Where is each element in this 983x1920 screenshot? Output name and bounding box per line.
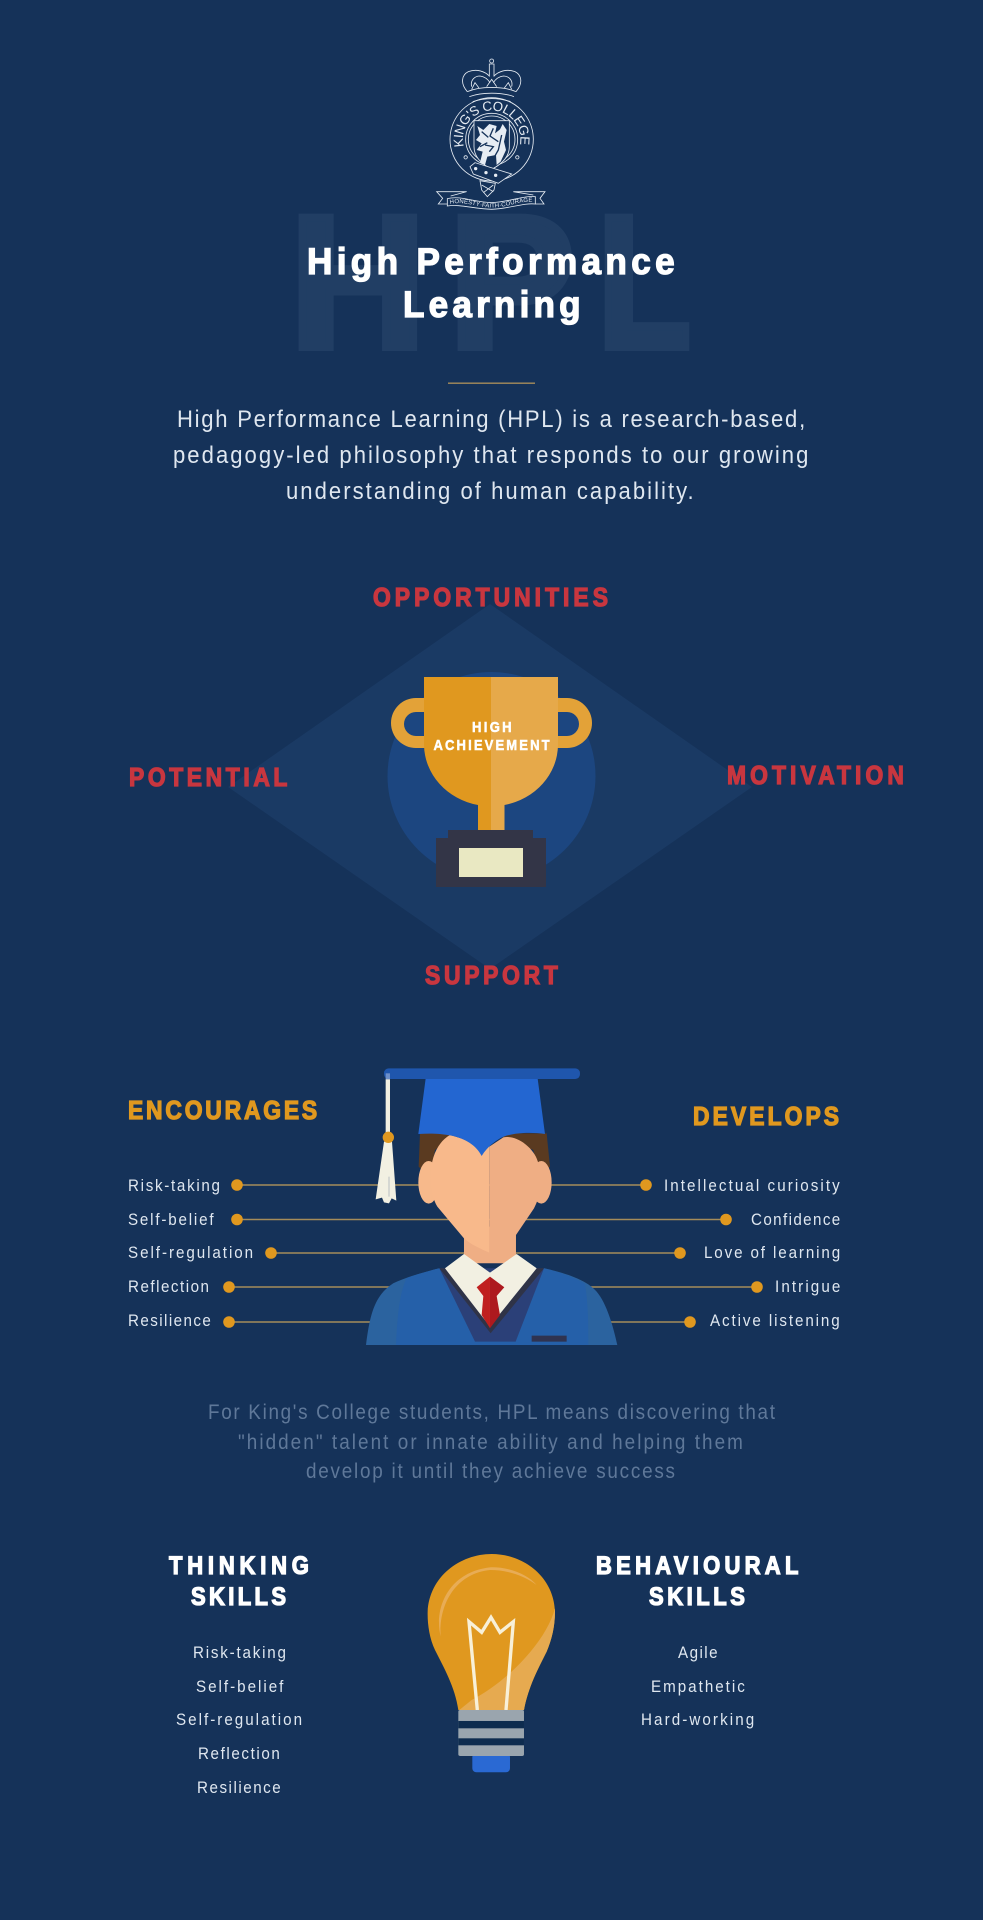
list: encourages: Self-belief: [128, 1211, 214, 1229]
hair: [419, 1133, 550, 1178]
labels around the diamond: POTENTIAL: [129, 764, 287, 792]
list: encourages: Self-regulation: [128, 1244, 253, 1262]
heading: develops: DEVELOPS: [693, 1103, 839, 1131]
neck: [464, 1227, 516, 1263]
list: thinking skills: Self-belief: [196, 1678, 284, 1696]
list: behavioural skills: [641, 1644, 754, 1729]
seal lettering: [463, 110, 520, 147]
roundels: [464, 156, 519, 159]
icon: graduate: [366, 1068, 617, 1345]
list: develops: Love of learning: [704, 1244, 840, 1262]
heading: behavioural skills: BEHAVIOURAL: [596, 1552, 798, 1579]
connector dots: [223, 1179, 763, 1328]
small shield: [480, 181, 495, 197]
closing paragraph: [208, 1401, 775, 1483]
list: develops: Confidence: [751, 1211, 840, 1229]
list: encourages: Resilience: [128, 1312, 211, 1330]
robe: [366, 1268, 617, 1345]
heading: thinking skills: SKILLS: [191, 1583, 286, 1610]
list: develops: Intrigue: [775, 1278, 840, 1296]
socket: [472, 1753, 510, 1772]
face: [431, 1135, 489, 1253]
background lettering: HPL: [290, 177, 691, 388]
background lettering: HPL: H: [290, 177, 426, 387]
scroll and motto: [436, 191, 546, 210]
icon: light bulb: [428, 1554, 555, 1772]
heading: thinking skills: THINKING: [169, 1552, 309, 1579]
cap: [418, 1076, 545, 1156]
tassel: [376, 1073, 396, 1203]
filament: [469, 1617, 513, 1710]
heading: encourages: ENCOURAGES: [128, 1097, 317, 1125]
list: develops: [664, 1177, 840, 1330]
trophy text: [434, 719, 550, 753]
scroll and motto: HONESTY·FAITH·COURAGE: [450, 198, 532, 208]
intro paragraph: understanding of human capability.: [286, 477, 694, 504]
heading: behavioural skills: SKILLS: [649, 1583, 745, 1610]
intro paragraph: pedagogy-led philosophy that responds to our growing: [173, 441, 808, 468]
base: [436, 830, 546, 887]
list: encourages: Reflection: [128, 1278, 209, 1296]
list: behavioural skills: Agile: [678, 1644, 718, 1662]
necktie: [477, 1277, 504, 1328]
labels around the diamond: MOTIVATION: [727, 762, 904, 790]
heading: behavioural skills: [596, 1552, 798, 1610]
list: develops: Active listening: [710, 1312, 840, 1330]
connector lines: [229, 1185, 757, 1322]
shield with lion: [474, 121, 509, 169]
circle behind trophy: [388, 672, 596, 880]
heading: thinking skills: [169, 1552, 309, 1610]
list: thinking skills: Risk-taking: [193, 1644, 286, 1662]
closing paragraph: "hidden" talent or innate ability and helping them: [238, 1431, 743, 1454]
labels around the diamond: SUPPORT: [425, 962, 558, 990]
pocket: [532, 1336, 567, 1342]
list: encourages: Risk-taking: [128, 1177, 220, 1195]
list: encourages: [128, 1177, 253, 1330]
background lettering: HPL: L: [598, 178, 691, 388]
closing paragraph: develop it until they achieve success: [306, 1460, 675, 1483]
labels around the diamond: [129, 584, 904, 990]
belt: [470, 163, 512, 183]
crown: [463, 59, 521, 102]
icon: trophy: [391, 677, 592, 887]
intro paragraph: [173, 405, 808, 504]
seal rings: [450, 98, 533, 181]
list: thinking skills: Self-regulation: [176, 1711, 302, 1729]
background lettering: HPL: P: [449, 177, 574, 387]
list: behavioural skills: Hard-working: [641, 1711, 754, 1729]
collar: [445, 1254, 537, 1327]
list: develops: Intellectual curiosity: [664, 1177, 840, 1195]
list: thinking skills: Reflection: [198, 1745, 280, 1763]
list: thinking skills: Resilience: [197, 1779, 281, 1797]
title: Learning: [403, 283, 581, 325]
title: [307, 240, 675, 325]
closing paragraph: For King's College students, HPL means discovering that: [208, 1401, 775, 1424]
icon: King's College crest: [436, 58, 546, 210]
list: thinking skills: [176, 1644, 302, 1797]
cup: [424, 677, 491, 830]
ears: [418, 1161, 439, 1204]
title: High Performance: [307, 240, 675, 282]
diagram: diamond background: [228, 604, 752, 969]
lapels: [439, 1268, 544, 1342]
handles: [391, 698, 430, 748]
trophy text: HIGH: [472, 719, 512, 735]
icon: King's College crest: KING'S COLLEGE: [454, 101, 530, 147]
list: behavioural skills: Empathetic: [651, 1678, 745, 1696]
glass: [428, 1554, 555, 1710]
trophy text: ACHIEVEMENT: [434, 737, 550, 753]
plaque: [459, 848, 523, 877]
labels around the diamond: OPPORTUNITIES: [373, 584, 608, 612]
intro paragraph: High Performance Learning (HPL) is a research-based,: [177, 405, 805, 432]
